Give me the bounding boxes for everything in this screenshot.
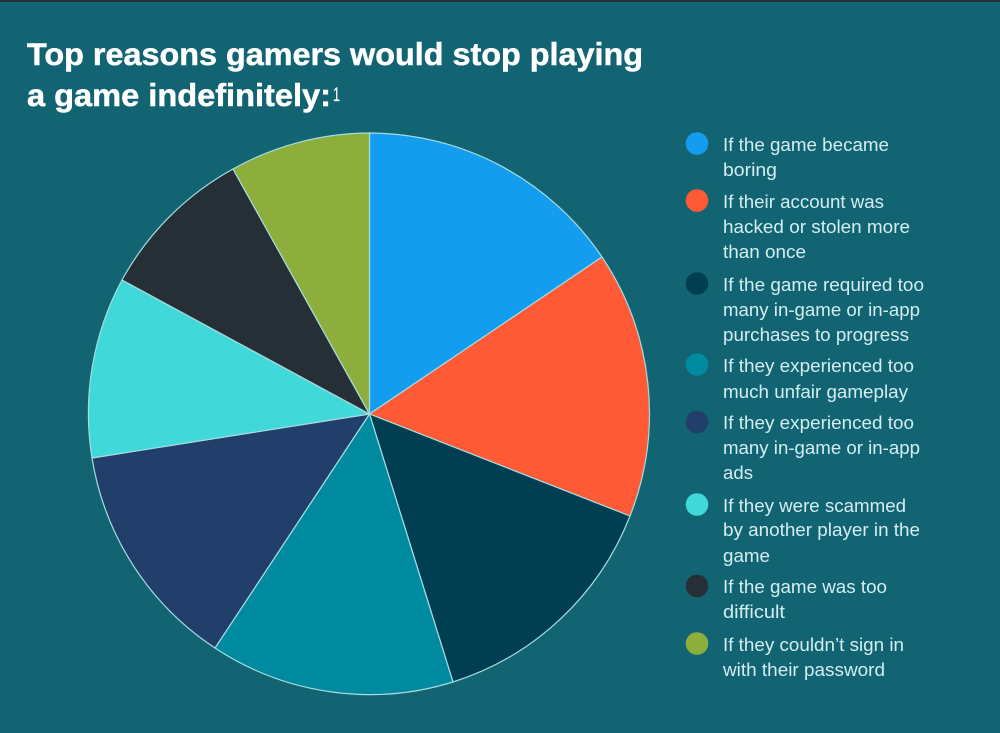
legend item: game too difficult <box>686 575 887 622</box>
legend item: too many ads: many in-game or in-app <box>723 437 920 458</box>
legend item: unfair gameplay <box>686 353 914 402</box>
pie chart <box>88 133 649 695</box>
legend item: account hacked or stolen: If their account was <box>723 191 884 212</box>
title <box>27 36 643 113</box>
legend item: scammed by another player: game <box>723 545 770 566</box>
slice: scammed by another player <box>88 280 370 458</box>
legend item: account hacked or stolen: than once <box>723 241 806 262</box>
legend item: too many purchases: If the game required too <box>723 274 924 295</box>
legend item: scammed by another player <box>686 493 920 566</box>
legend item: game became boring: boring <box>723 159 777 180</box>
legend item: game became boring: If the game became <box>723 134 889 155</box>
legend item: too many purchases: many in-game or in-app <box>723 299 920 320</box>
legend item: too many purchases <box>686 272 924 345</box>
legend item: too many purchases: purchases to progress <box>723 324 909 345</box>
legend item: game too difficult: difficult <box>723 601 785 622</box>
legend item: account hacked or stolen <box>686 189 910 262</box>
slice: game too difficult <box>122 169 370 414</box>
legend item: account hacked or stolen: hacked or stolen more <box>723 216 910 237</box>
legend item: could not sign in: If they couldn’t sign in <box>723 634 904 655</box>
legend item: game became boring <box>686 132 889 180</box>
legend item: too many ads: If they experienced too <box>723 412 914 433</box>
legend item: game too difficult: If the game was too <box>723 576 887 597</box>
legend item: could not sign in: with their password <box>722 659 885 680</box>
title: 1 <box>333 85 340 106</box>
legend item: scammed by another player: If they were scammed <box>723 495 906 516</box>
slice: account hacked or stolen <box>370 257 649 516</box>
title: a game indefinitely: <box>27 77 331 113</box>
slice: game became boring <box>370 133 602 414</box>
legend item: scammed by another player: by another player in the <box>723 519 920 540</box>
legend item: too many ads: ads <box>723 462 753 483</box>
legend item: could not sign in <box>686 632 904 680</box>
legend item: unfair gameplay: much unfair gameplay <box>723 381 909 402</box>
title: Top reasons gamers would stop playing <box>27 36 643 72</box>
slice: too many ads <box>92 414 370 648</box>
legend <box>686 132 924 680</box>
legend item: too many ads <box>686 411 920 483</box>
slice: unfair gameplay <box>215 414 453 695</box>
legend item: unfair gameplay: If they experienced too <box>723 355 914 376</box>
slice: too many purchases <box>370 414 630 682</box>
slice: could not sign in <box>233 133 370 414</box>
